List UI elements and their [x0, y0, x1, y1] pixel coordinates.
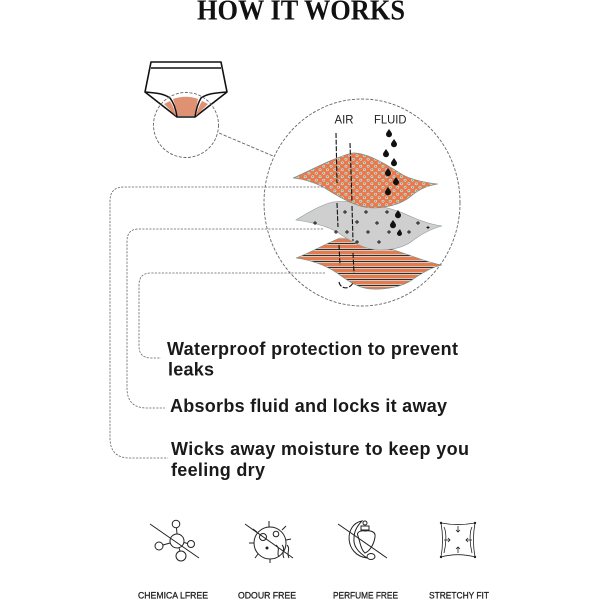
icon: stretchy fit: [440, 522, 476, 558]
icon: underwear illustration: [145, 62, 227, 117]
connector between circles: [219, 133, 273, 156]
large magnifier circle: [264, 99, 460, 306]
text: waterproof protection: Waterproof protection to prevent: [167, 339, 458, 359]
leader line: absorbent layer: [127, 229, 323, 408]
small magnifier circle: [154, 92, 218, 158]
leader line: waterproof layer: [139, 273, 325, 358]
leader line: wicking layer: [110, 187, 323, 458]
text: wicks moisture: Wicks away moisture to keep you: [171, 439, 469, 459]
text: waterproof protection: [167, 339, 458, 380]
air flow dashes: [336, 133, 354, 288]
label: AIR: AIR: [334, 114, 354, 126]
icon: odour free: [245, 521, 293, 563]
layer 3: waterproof striped fabric: [296, 238, 442, 289]
text: absorbs fluid: Absorbs fluid and locks it away: [170, 396, 447, 416]
fluid droplets: [383, 129, 402, 236]
icon: perfume free: [338, 521, 387, 560]
layer 1: wicking dotted fabric: [293, 153, 438, 208]
text: wicks moisture: feeling dry: [171, 460, 265, 480]
icon: chemical free: [150, 520, 199, 561]
layer 2: absorbent grey fabric: [296, 202, 442, 250]
label: FLUID: FLUID: [374, 114, 406, 126]
text: waterproof protection: leaks: [168, 360, 214, 380]
text: wicks moisture: [171, 439, 469, 480]
